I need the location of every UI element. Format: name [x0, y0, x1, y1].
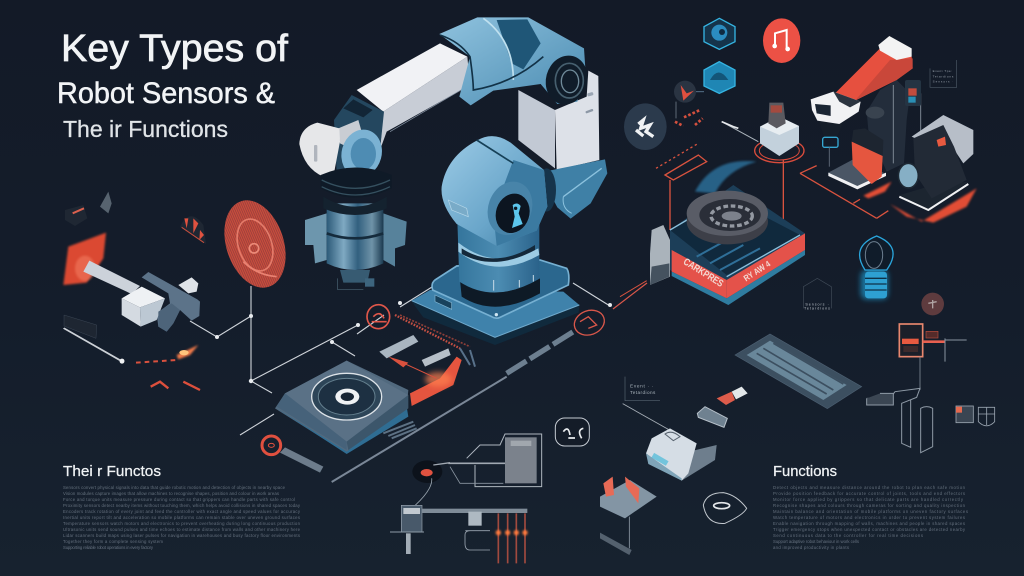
house label — [803, 278, 831, 311]
panel: red robot — [811, 36, 977, 223]
grey bracket — [142, 272, 200, 332]
house label: Tetardions — [804, 307, 830, 311]
slanted data panel — [735, 334, 862, 409]
sensor tray: CARKPRES — [681, 257, 725, 290]
robot arm tool cylinder — [305, 167, 407, 289]
left plate — [828, 128, 886, 189]
robot arm wrist and gripper — [299, 95, 387, 182]
panel: right upper icons — [620, 18, 957, 315]
flame — [136, 345, 198, 363]
left body copy: Sensors convert physical signals into data that guide robotic motion and detection of objects in nearby space — [63, 485, 286, 490]
left body copy: Vision modules capture images that allow machines to recognise shapes, position and colour in work areas — [63, 491, 279, 496]
left text block — [63, 463, 301, 550]
small label card — [625, 377, 660, 401]
icon: rounded badge — [555, 418, 589, 446]
right body copy: Enable navigation through mapping of walls, machines and people in shared spaces — [773, 521, 965, 526]
swoosh — [695, 161, 757, 193]
right body copy: Detect objects and measure distance around the robot to plan each safe motion — [773, 485, 966, 490]
left body copy: Proximity sensors detect nearby items without touching them, which helps avoid collisions in shared spaces today — [63, 503, 301, 508]
mini label box top right: Event Tpe: — [933, 69, 952, 73]
left body copy: Temperature sensors watch motors and electronics to prevent overheating during long continuous production — [63, 521, 301, 526]
left body copy: Encoders track rotation of every joint and feed the controller with exact angle and speed values for accuracy — [63, 509, 301, 514]
right body copy: Recognise shapes and colours through cameras for sorting and quality inspection — [773, 503, 966, 508]
panel: robot base and column — [412, 220, 579, 345]
column — [457, 220, 540, 307]
mini label box top right — [930, 60, 957, 87]
inner tray — [432, 260, 569, 318]
robot head with sensor — [442, 136, 547, 246]
right body copy: Trigger emergency stops when unexpected contact or obstacles are detected nearby — [773, 527, 966, 532]
small red dial — [262, 436, 281, 455]
right body copy: Provide position feedback for accurate control of joints, tools and end effectors — [773, 491, 965, 496]
title: Robot Sensors & — [57, 77, 275, 110]
right red dial — [571, 306, 608, 339]
red floor glow — [863, 182, 977, 223]
red arm — [835, 36, 913, 101]
mini label box top right: Sensors · — [933, 79, 953, 83]
white chassis — [623, 404, 717, 481]
red fragments — [151, 382, 200, 390]
icon: small red bird circle — [674, 81, 704, 126]
left body copy — [63, 485, 301, 550]
line schematic — [448, 434, 542, 487]
red cable — [395, 315, 460, 348]
icon: red music circle — [763, 18, 800, 63]
right body copy: Monitor force applied by grippers so that delicate parts are handled correctly — [773, 497, 964, 502]
piston rod — [83, 261, 140, 294]
glowing bulb — [860, 236, 893, 299]
small tiles — [697, 387, 748, 427]
outlined loop icon — [703, 493, 747, 523]
left body copy: Together they form a complete sensing system — [63, 539, 163, 544]
title — [57, 28, 288, 142]
outer base plate — [412, 290, 579, 345]
left sensors — [63, 192, 296, 390]
robot arm forearm — [357, 43, 470, 150]
right body copy — [773, 485, 968, 550]
bracket front — [158, 303, 180, 332]
red connector right of robot — [613, 283, 647, 309]
outline cylinders — [867, 388, 933, 453]
robot arm rear upright — [518, 71, 607, 219]
muted red dot — [921, 293, 944, 315]
mini label box top right: Tetardions — [933, 74, 954, 78]
left red dial — [367, 305, 390, 329]
glow plate — [63, 233, 106, 285]
left body copy: Ultrasonic units send sound pulses and time echoes to estimate distance from walls and other machinery here — [63, 527, 301, 532]
red monitor — [899, 324, 967, 390]
rail with probes — [390, 505, 528, 563]
panel: speaker module — [262, 315, 589, 563]
glowing red strap — [388, 357, 462, 406]
panel: robot arm — [299, 17, 608, 348]
left body copy: Supporting reliable robot operations in every factory — [63, 545, 154, 550]
right subheading: Functions — [773, 463, 837, 480]
small dark module — [65, 192, 112, 226]
red radar disc — [214, 192, 296, 296]
chip parts — [379, 315, 475, 367]
sensor tray — [620, 185, 805, 305]
small bar — [280, 447, 323, 473]
arrows badge — [180, 216, 206, 244]
small outline icons — [956, 406, 995, 426]
left body copy: Lidar scanners build maps using laser pulses for navigation in warehouses and busy factory floor environments — [63, 533, 300, 538]
icon: hexagon sensor top — [704, 18, 735, 49]
left body copy: Force and torque units measure pressure during contact so that grippers can handle parts with safe control — [63, 497, 295, 502]
panel: lower right parts — [600, 324, 995, 555]
label box — [63, 315, 124, 364]
title: Key Types of — [61, 28, 288, 70]
title: The ir Functions — [63, 116, 228, 142]
right text block — [773, 463, 968, 550]
camera head — [811, 92, 861, 167]
right body copy: Maintain balance and orientation of mobile platforms on uneven factory surfaces — [773, 509, 968, 514]
right body copy: Watch temperature of motors and electronics in order to prevent system failures — [773, 515, 965, 520]
sensor puck with rings — [722, 103, 804, 163]
red node — [410, 460, 450, 510]
module body — [275, 361, 417, 454]
left body copy: Inertial units report tilt and acceleration so mobile platforms can remain stable over uneven ground surfaces — [63, 515, 300, 520]
sensor tray: RY AW 4 — [742, 259, 772, 283]
right body copy: and improved productivity in plants — [773, 545, 849, 550]
robot arm elbow — [439, 17, 593, 109]
red bracket — [656, 143, 888, 230]
long diagonal rod — [332, 332, 573, 482]
right body copy: Support adaptive robot behaviour in work cells — [773, 539, 859, 544]
icon: hexagon sensor bottom — [704, 62, 735, 93]
small label card: Tetardions — [630, 390, 656, 395]
left subheading: Thei r Functos — [63, 463, 161, 480]
small label card: Event · · — [630, 384, 653, 389]
white sensor box — [122, 287, 165, 327]
dark body — [866, 80, 921, 172]
right body copy: Send continuous data to the controller for real time decisions — [773, 533, 923, 538]
house label: Sensors · — [805, 302, 829, 306]
icon: dark circle glyph — [624, 103, 667, 150]
orange bracket module — [600, 477, 657, 555]
connector lines: left circuit — [64, 283, 612, 435]
dark machine right — [898, 115, 973, 210]
